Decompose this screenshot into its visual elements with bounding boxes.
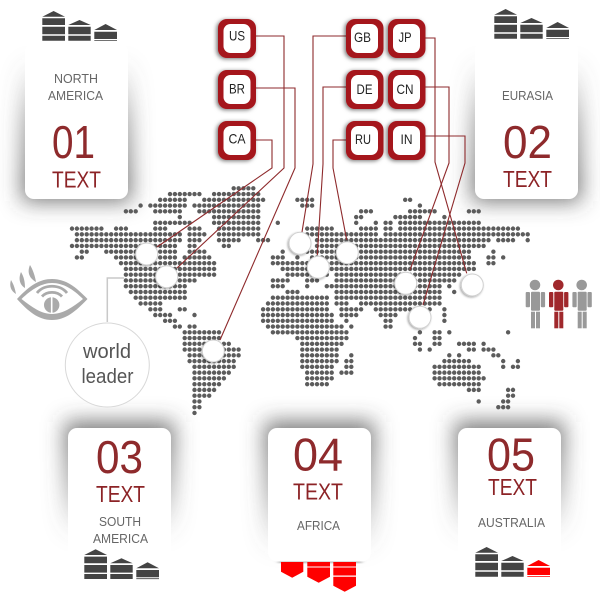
button JP: JP	[398, 29, 412, 45]
region name: NORTH	[54, 71, 98, 86]
icon: building bars	[42, 11, 117, 41]
person grey left	[526, 280, 545, 328]
button RU: RU	[355, 131, 371, 147]
button JP	[388, 19, 426, 58]
icon: people	[526, 280, 592, 328]
button GB	[346, 19, 384, 58]
person grey right	[572, 280, 592, 328]
region name: EURASIA	[502, 88, 553, 103]
button CA	[218, 121, 256, 160]
person red centre	[549, 280, 568, 328]
region name: AFRICA	[297, 518, 340, 533]
button DE: DE	[356, 81, 372, 97]
button GB: GB	[354, 29, 371, 45]
button IN: IN	[400, 131, 412, 147]
panel: card 03 South America	[65, 422, 174, 579]
icon: building bars	[494, 9, 569, 39]
region name	[93, 514, 148, 546]
panel: card 01 North America	[22, 11, 131, 201]
text label: TEXT	[52, 166, 101, 192]
region name: SOUTH	[99, 514, 141, 529]
button US: US	[229, 28, 245, 44]
region name: AMERICA	[48, 88, 103, 103]
connector: world leader	[107, 278, 124, 322]
number 04: 04	[293, 428, 343, 480]
icon: red down bars	[281, 562, 356, 592]
number 01: 01	[52, 116, 95, 168]
region name	[48, 71, 103, 103]
dotted world map	[72, 188, 528, 413]
country code buttons	[218, 19, 426, 160]
button IN	[388, 121, 426, 160]
callout: world leader	[65, 323, 149, 407]
icon: building bars with red	[475, 547, 550, 577]
text label: TEXT	[293, 478, 343, 504]
callout: world leader: leader	[82, 366, 134, 388]
callout: world leader: world	[82, 341, 131, 363]
text label: TEXT	[503, 166, 552, 192]
number 02: 02	[503, 116, 552, 168]
panel: card 02 Eurasia	[472, 9, 581, 201]
panel: card 04 Africa	[265, 422, 374, 592]
button RU	[346, 121, 384, 160]
number 05: 05	[487, 428, 535, 480]
button DE	[346, 70, 384, 109]
region name: AMERICA	[93, 531, 148, 546]
button US	[218, 19, 256, 58]
button CA: CA	[228, 130, 246, 146]
button CN	[388, 70, 426, 109]
icon: eye	[10, 265, 87, 320]
button BR: BR	[229, 80, 245, 96]
region name: AUSTRALIA	[478, 515, 545, 530]
number 03: 03	[96, 431, 143, 483]
button BR	[218, 70, 256, 109]
connector lines	[157, 36, 467, 340]
text label: TEXT	[488, 474, 537, 500]
text label: TEXT	[96, 481, 145, 507]
panel: card 05 Australia	[455, 422, 564, 577]
icon: building bars	[84, 549, 159, 579]
map pins	[136, 232, 483, 362]
button CN: CN	[396, 81, 414, 97]
